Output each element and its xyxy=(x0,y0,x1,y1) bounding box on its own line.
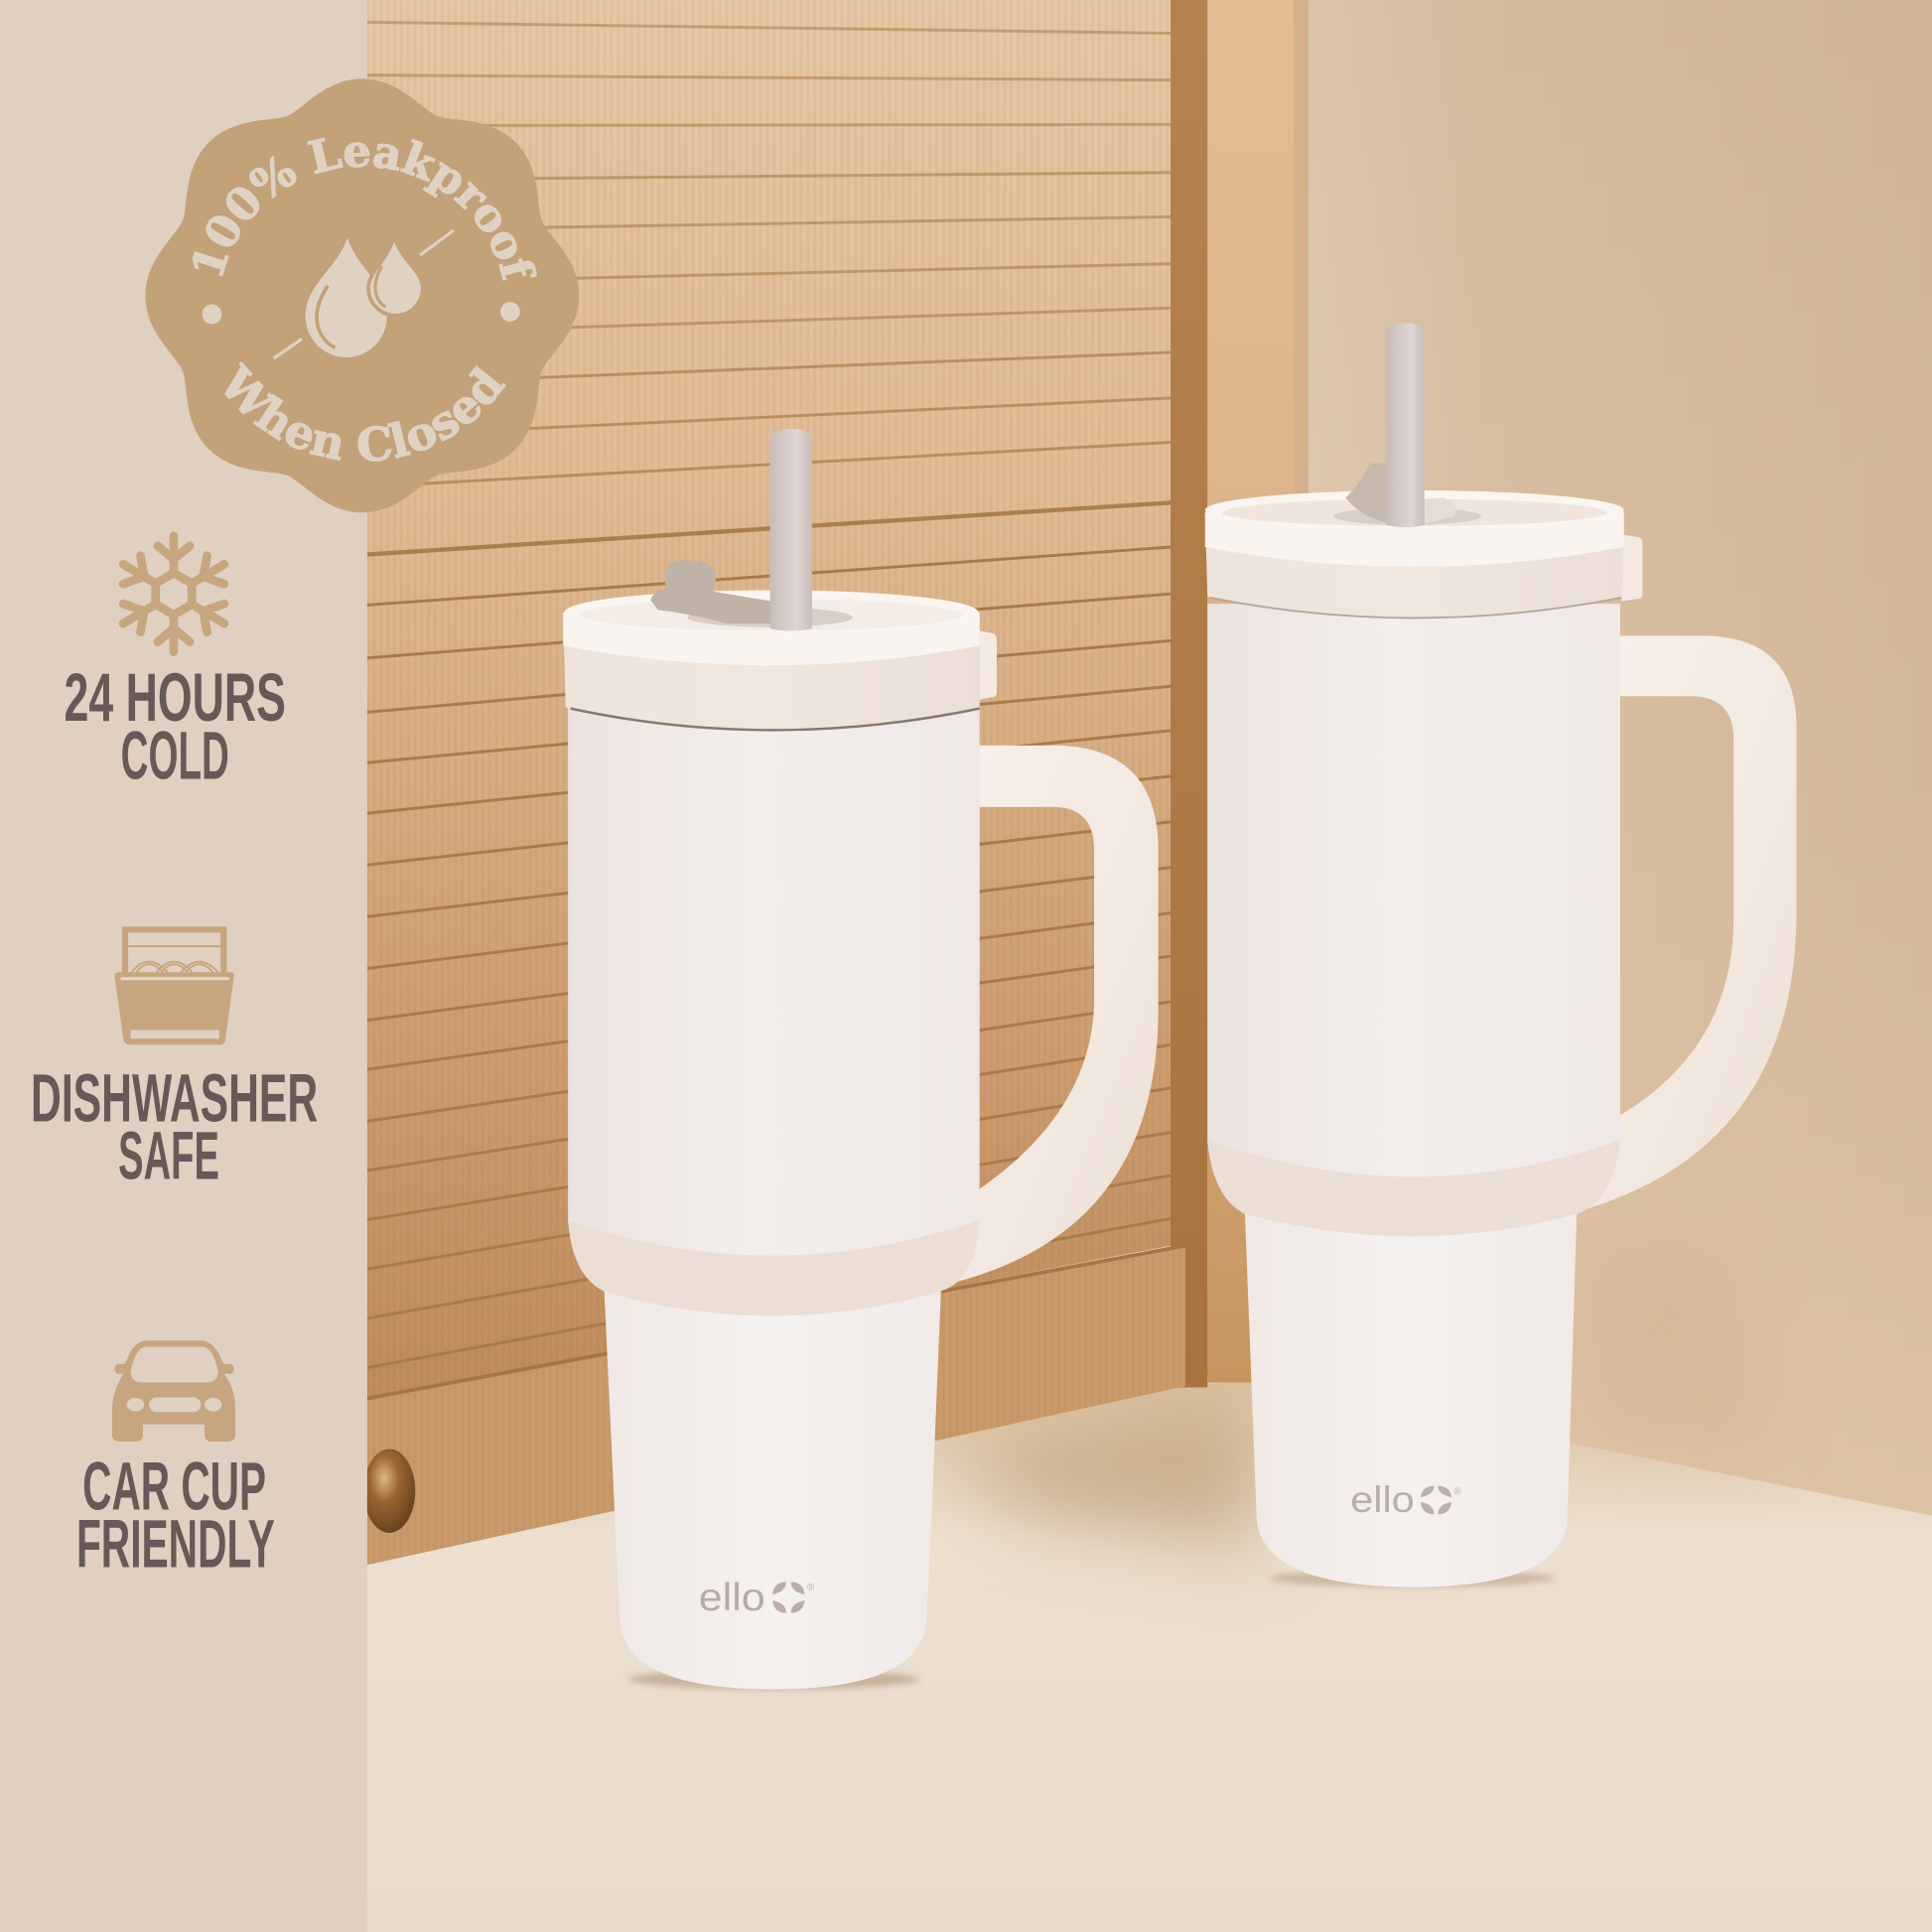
handle xyxy=(1578,635,1796,1210)
floor surface xyxy=(367,1380,1932,1932)
flip cap end xyxy=(1425,497,1456,523)
floor shadow behind cups xyxy=(949,1399,1269,1553)
logo: ® xyxy=(807,1583,815,1593)
straw xyxy=(1386,323,1425,527)
lid top xyxy=(564,590,978,634)
badge dots xyxy=(203,302,520,324)
sip recess xyxy=(688,608,853,627)
straw xyxy=(770,429,812,628)
straw flip cap xyxy=(650,560,771,623)
icon: car xyxy=(112,1340,235,1442)
base xyxy=(604,1282,941,1690)
logo: ® xyxy=(1453,1486,1461,1497)
lid side xyxy=(563,613,980,731)
label: 24 HOURS xyxy=(65,660,286,736)
contact shadow xyxy=(1269,1570,1555,1587)
straw front xyxy=(1386,456,1425,527)
icon: dishwasher xyxy=(114,929,234,1044)
label: FRIENDLY xyxy=(76,1507,275,1583)
left feature panel xyxy=(0,0,367,1932)
logo: ello xyxy=(1350,1478,1415,1520)
logo mark xyxy=(772,1583,804,1613)
body xyxy=(568,702,980,1258)
brass knob xyxy=(363,1449,415,1533)
leakproof badge xyxy=(145,78,580,512)
wall background xyxy=(1294,0,1932,1553)
label: CAR CUP xyxy=(82,1449,266,1524)
sip recess xyxy=(1333,507,1481,525)
badge top text: 100% Leakproof xyxy=(193,137,537,281)
silicone collar xyxy=(1207,1140,1620,1236)
wood post xyxy=(1171,0,1309,1387)
base xyxy=(1244,1201,1578,1587)
lid tab xyxy=(1621,535,1642,602)
feature: 24 hours cold xyxy=(65,536,305,793)
feature: car cup friendly xyxy=(76,1340,285,1583)
wood bottom trim xyxy=(367,1246,1185,1565)
lid seam xyxy=(1210,598,1621,618)
water drops icon xyxy=(274,230,454,358)
straw front xyxy=(770,554,812,630)
handle xyxy=(936,746,1159,1284)
lid seam xyxy=(571,709,980,730)
slatted wood panel xyxy=(367,0,1171,1399)
feature: dishwasher safe xyxy=(31,929,337,1194)
slat grooves xyxy=(367,22,1171,1368)
label: COLD xyxy=(121,718,229,793)
logo mark xyxy=(1421,1486,1451,1514)
right tumbler xyxy=(1205,323,1796,1587)
badge bottom text: When Closed xyxy=(224,361,506,462)
lid side xyxy=(1205,512,1624,619)
logo xyxy=(699,1577,815,1619)
wall shadow beside right cup xyxy=(1578,1232,1774,1453)
label: SAFE xyxy=(118,1119,219,1194)
scalloped seal xyxy=(145,78,579,512)
lid top xyxy=(1205,490,1624,530)
lid tab xyxy=(980,630,997,700)
left tumbler xyxy=(563,429,1159,1690)
body xyxy=(1207,604,1620,1178)
straw flip cap xyxy=(1345,464,1387,522)
label: DISHWASHER xyxy=(31,1060,318,1136)
logo: ello xyxy=(699,1577,765,1619)
silicone collar xyxy=(568,1220,980,1315)
icon: snowflake xyxy=(123,536,224,652)
logo xyxy=(1350,1478,1461,1520)
contact shadow xyxy=(628,1670,919,1690)
